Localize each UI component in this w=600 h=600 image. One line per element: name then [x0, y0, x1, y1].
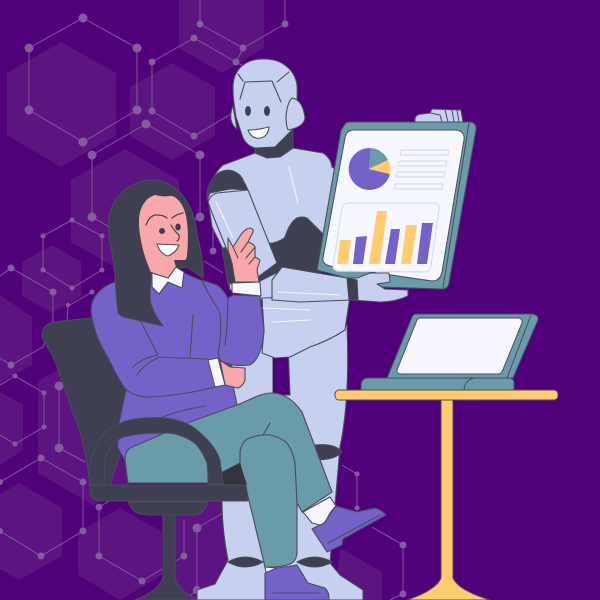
face: [139, 195, 188, 278]
table top: [335, 390, 558, 400]
seat dark wedge: [208, 463, 247, 485]
woman: [91, 180, 386, 600]
robot torso: [207, 148, 345, 300]
lower hand: [220, 360, 245, 388]
hair: [109, 180, 203, 326]
robot: [197, 59, 363, 600]
molecular network lines and nodes: [0, 0, 406, 600]
robot pelvis: [262, 296, 350, 358]
robot raised arm: [207, 170, 277, 277]
facial lines: [146, 213, 183, 241]
raised hand: [228, 228, 260, 282]
pie chart: [349, 148, 390, 190]
text placeholder lines: [394, 150, 449, 189]
background hexagons: [0, 0, 382, 600]
raised sleeve: [202, 280, 264, 365]
chair stand: [135, 515, 197, 600]
tablet screen: [323, 130, 464, 281]
bar chart: [333, 203, 439, 272]
robot neck: [255, 128, 293, 158]
sweater body: [91, 273, 237, 460]
robot head: [231, 59, 305, 148]
large tablet with charts: [317, 122, 476, 289]
teal legs: [125, 393, 332, 567]
sleeve cuff lower: [208, 358, 225, 387]
purple lower leg tail shadow: [118, 430, 135, 460]
woman smile: [157, 244, 179, 256]
robot left ear: [231, 106, 237, 129]
table: [335, 314, 558, 600]
chair back: [42, 317, 135, 485]
collar: [152, 267, 184, 294]
laptop tablet on table: [361, 314, 538, 390]
robot hand behind tablet: [415, 109, 463, 122]
raised cuff: [232, 282, 261, 296]
robot smile: [248, 127, 269, 138]
lower shoe: [265, 565, 329, 600]
folded arm: [113, 357, 215, 396]
sock raised: [303, 497, 336, 525]
robot forearm and hand holding tablet: [272, 267, 408, 302]
lower sock: [265, 567, 276, 573]
chair armrest and seat: [89, 418, 248, 515]
raised shoe: [312, 506, 386, 552]
robot legs and feet: [197, 325, 363, 600]
robot dark waist: [222, 217, 330, 284]
chair: [42, 317, 197, 600]
